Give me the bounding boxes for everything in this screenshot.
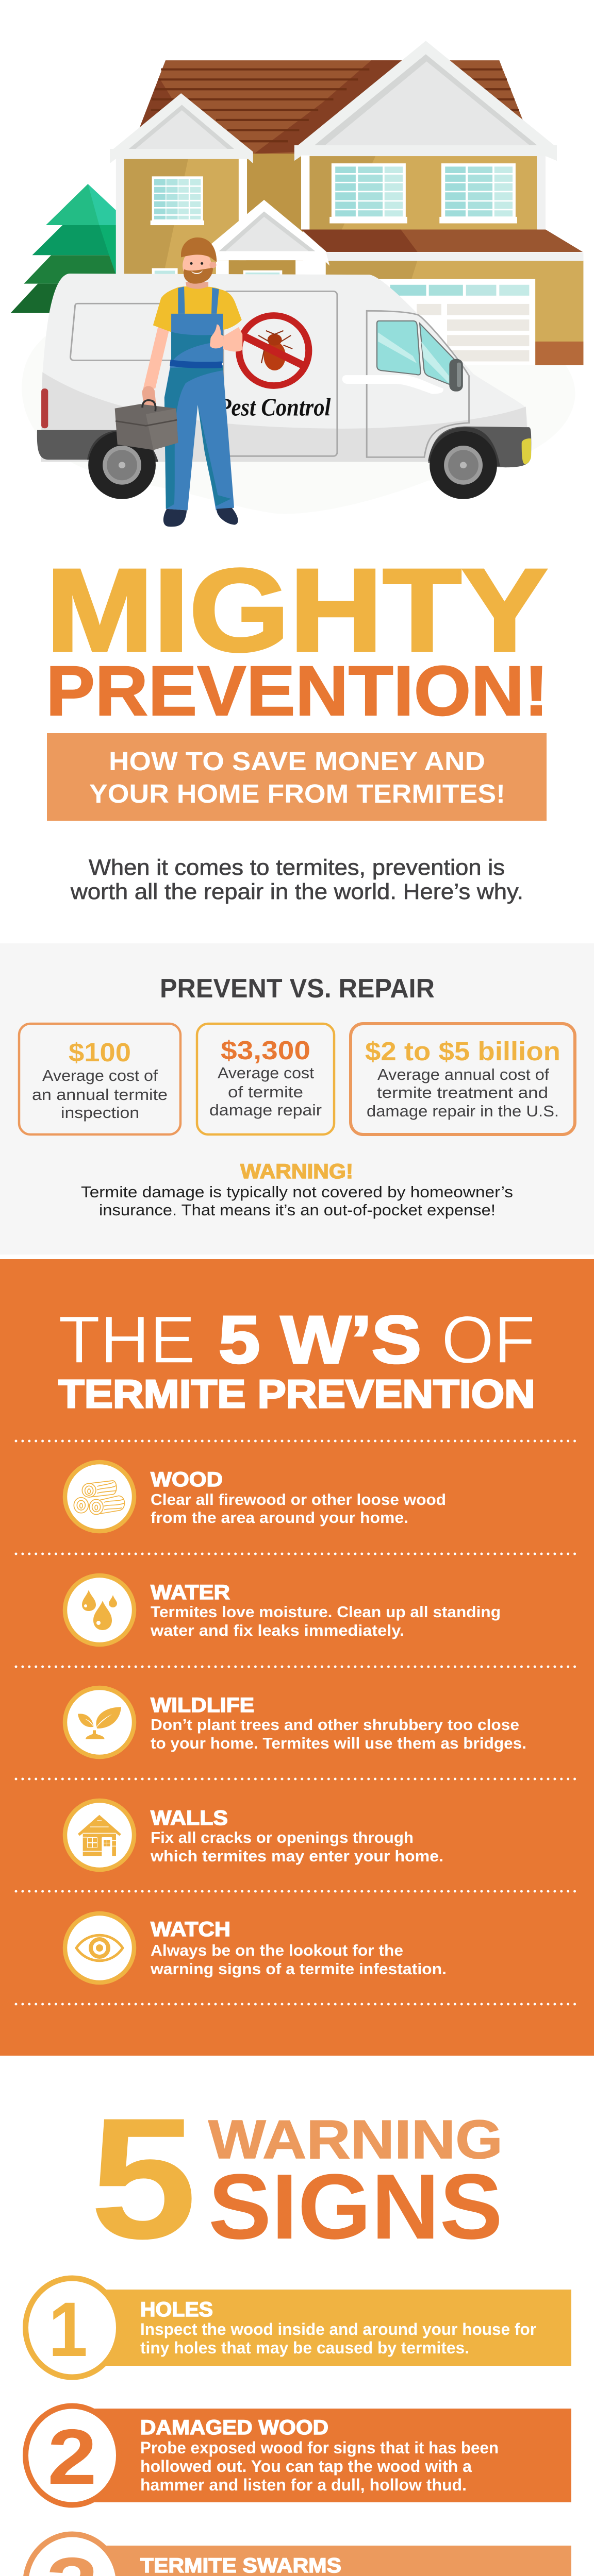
text: warning signs of a termite infestation. [150,1960,447,1978]
text: Inspect the wood inside and around your house for [140,2320,536,2338]
row: watch [65,1913,447,1982]
stat card: $3,300: of termite [228,1083,303,1101]
warning note: insurance. That means it’s an out-of-pocket expense! [99,1201,496,1219]
text: to your home. Termites will use them as bridges. [151,1734,526,1752]
subtitle banner [47,733,547,821]
stat card: $3,300: $3,300 [221,1036,310,1065]
icon: wheels [88,431,497,499]
number badge: 1 [48,2286,88,2372]
number badge [26,2406,119,2505]
background blob [22,311,575,514]
heading: 5 warning signs: SIGNS [208,2155,503,2259]
heading: OF [441,1302,535,1377]
text [151,1468,446,1527]
panel: the 5 W's of termite prevention [0,1259,594,2056]
porch gable [152,200,329,278]
window: upper right [439,163,517,224]
heading: THE [58,1302,195,1377]
row: wildlife [65,1688,526,1757]
text [151,1694,526,1752]
number badge: 2 [47,2413,97,2501]
text [140,2416,499,2494]
heading: 5 warning signs: WARNING [208,2109,503,2170]
text: WOOD [151,1468,223,1491]
heading: 5 warning signs: 5 [90,2082,197,2275]
text [140,2298,536,2357]
row: walls [65,1801,443,1870]
stat card: $2 to $5 billion: termite treatment and [377,1083,548,1101]
icon: eye [65,1913,134,1982]
intro text: worth all the repair in the world. Here’s why. [70,879,523,904]
intro text: When it comes to termites, prevention is [89,855,505,880]
garage door [379,279,535,365]
text [150,1918,447,1978]
stat card: $3,300: Average cost [218,1064,314,1082]
warning note: WARNING! [240,1160,353,1183]
icon: logs [65,1462,134,1531]
warning note: Termite damage is typically not covered by homeowner’s [81,1183,513,1201]
stat card: $100: $100 [69,1038,131,1067]
stat card: $2 to $5 billion [351,1024,575,1134]
icon: cabin [65,1801,134,1870]
title: PREVENTION! [46,652,549,731]
icon: pine tree [11,184,116,313]
stat card: $2 to $5 billion: Average annual cost of [377,1065,549,1083]
stat card: $2 to $5 billion: $2 to $5 billion [365,1037,560,1066]
sign 1: holes [26,2278,571,2377]
left gable [110,93,253,163]
technician [115,238,242,527]
stat card: $3,300: damage repair [209,1101,322,1119]
text [150,1807,443,1865]
stat card: $3,300 [197,1024,334,1134]
icon: sprout [65,1688,134,1757]
text: WALLS [151,1807,228,1829]
hero illustration: house, pest control van and technician [11,41,583,527]
text: Don’t plant trees and other shrubbery too close [151,1716,519,1734]
icon: no-bugs sign [239,315,309,386]
heading: 5 warning signs [90,2082,503,2275]
text: WILDLIFE [151,1694,254,1717]
text: from the area around your home. [151,1509,408,1527]
stat card: $2 to $5 billion: damage repair in the U.S. [367,1102,559,1120]
number badge [26,2534,119,2576]
icon: water drops [65,1575,134,1645]
text: Fix all cracks or openings through [151,1828,414,1846]
text: hammer and listen for a dull, hollow thud. [140,2476,467,2494]
house [110,41,583,365]
van lettering: Pest Control [218,393,331,421]
panel: prevent vs. repair [0,943,594,1255]
text: Probe exposed wood for signs that it has been [140,2438,499,2457]
row: wood [65,1462,446,1531]
text [150,1581,501,1639]
stat card: $100 [19,1024,180,1134]
text: DAMAGED WOOD [140,2416,328,2439]
subtitle banner: YOUR HOME FROM TERMITES! [89,779,505,808]
subtitle banner: HOW TO SAVE MONEY AND [109,747,485,776]
van [37,274,531,499]
window: upper centre [329,163,407,224]
row: water [65,1575,501,1645]
heading: 5 W’S [219,1302,421,1377]
stat card: $100: Average cost of [42,1066,158,1084]
window: upper left [151,176,204,225]
text: WATER [151,1581,230,1604]
warning note [81,1160,513,1219]
text: WATCH [151,1918,230,1941]
text: water and fix leaks immediately. [150,1621,404,1639]
text: tiny holes that may be caused by termites. [140,2338,469,2357]
stat card: $100: inspection [61,1104,139,1122]
sign 2: damaged wood [26,2406,571,2505]
heading [58,1302,535,1416]
heading: PREVENT VS. REPAIR [160,974,435,1004]
text: which termites may enter your home. [150,1847,443,1865]
heading: TERMITE PREVENTION [58,1372,535,1416]
text: HOLES [140,2298,213,2321]
title [46,545,549,731]
big gable [294,41,557,229]
title: MIGHTY [46,545,548,676]
intro text [70,855,523,904]
number badge [26,2278,119,2377]
text: Always be on the lookout for the [151,1941,403,1959]
text: hollowed out. You can tap the wood with a [140,2457,472,2476]
text: Clear all firewood or other loose wood [151,1490,446,1509]
stat card: $100: an annual termite [32,1086,168,1104]
sign 3: termite swarms [26,2534,571,2576]
text: Termites love moisture. Clean up all standing [151,1603,501,1621]
